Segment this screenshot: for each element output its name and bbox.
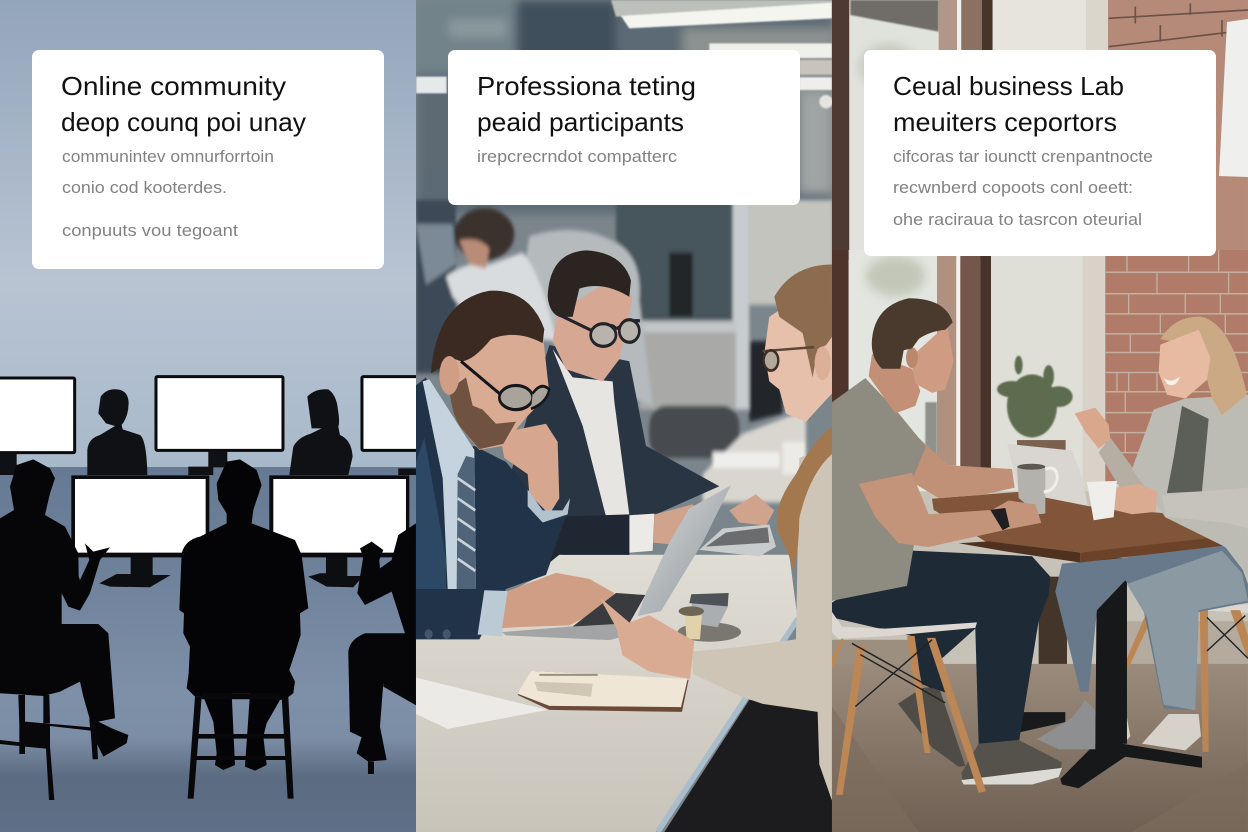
woman	[599, 264, 832, 801]
card heading two: Professiona teting	[477, 71, 696, 101]
card body one: conio cod kooterdes.	[62, 178, 227, 197]
card: professional testing	[448, 50, 800, 205]
left stool	[0, 695, 98, 800]
card body one	[62, 147, 274, 240]
brick wall	[1105, 250, 1248, 484]
man figure	[832, 298, 1041, 601]
white folder	[416, 678, 548, 729]
right stool leg	[368, 683, 416, 774]
wall and reveal	[991, 256, 1086, 491]
woman figure	[1075, 317, 1248, 577]
blurred background figures	[416, 200, 833, 502]
lower wall and floor	[832, 491, 1248, 832]
card heading two	[477, 71, 696, 137]
card body two: irepcrecrndot compatterc	[477, 147, 678, 166]
front row monitors	[71, 475, 409, 587]
plant	[997, 356, 1073, 451]
man's legs and shoes	[832, 551, 1062, 785]
card heading three: Ceual business Lab	[893, 71, 1124, 101]
woman's legs and shoes	[1037, 543, 1248, 750]
centre stool	[188, 693, 294, 799]
back row monitors	[0, 377, 422, 453]
traced scene	[416, 200, 833, 832]
open notebook	[518, 671, 689, 712]
front man head and hand	[431, 291, 570, 522]
ceiling and blurred lights	[416, 0, 833, 213]
traced scene	[832, 250, 1248, 832]
phone, cup and saucer	[678, 593, 741, 642]
card body three	[893, 147, 1153, 229]
open laptop	[1008, 444, 1088, 506]
panel: professional testing office	[416, 0, 833, 832]
front man forearm and hand on laptop	[478, 573, 614, 637]
card body three: cifcoras tar iounctt crenpantnocte	[893, 147, 1153, 166]
right edge silhouette	[348, 523, 416, 762]
wooden table	[932, 492, 1246, 563]
back row silhouettes	[87, 389, 353, 475]
card body three: recwnberd copoots conl oeett:	[893, 178, 1133, 197]
window and wooden frame	[832, 250, 991, 510]
panel: online community silhouettes	[0, 0, 422, 832]
woman's chair	[1125, 604, 1248, 752]
card heading two: peaid participants	[477, 107, 684, 137]
card: casual business lab	[864, 50, 1216, 256]
card heading one: Online community	[61, 71, 286, 101]
woman's cup	[1087, 481, 1117, 520]
right laptop	[699, 524, 776, 556]
card heading three	[893, 71, 1124, 137]
woman's trousers	[664, 700, 832, 832]
card heading three: meuiters ceportors	[893, 107, 1117, 137]
card heading one: deop counq poi unay	[61, 107, 306, 137]
panel: casual cafe conversation	[832, 0, 1248, 832]
front man jacket	[416, 377, 629, 639]
man's mug	[1017, 464, 1057, 514]
card body one: communintev omnurforrtoin	[62, 147, 274, 166]
man's chair	[832, 612, 986, 795]
wall note	[1219, 19, 1248, 177]
table surface	[416, 555, 798, 832]
card heading one	[61, 71, 306, 137]
card body one: conpuuts vou tegoant	[62, 221, 238, 240]
front left seated silhouette	[0, 459, 128, 757]
back man jacket and shirt	[509, 345, 774, 555]
laptop	[502, 485, 731, 640]
card body three: ohe raciraua to tasrcon oteurial	[893, 210, 1142, 229]
window top region	[832, 0, 1248, 260]
front centre seated silhouette	[179, 459, 308, 771]
table pedestal and feet	[1019, 558, 1202, 788]
card: online community	[32, 50, 384, 269]
back monitor stands	[0, 451, 416, 475]
back man head	[548, 250, 640, 381]
